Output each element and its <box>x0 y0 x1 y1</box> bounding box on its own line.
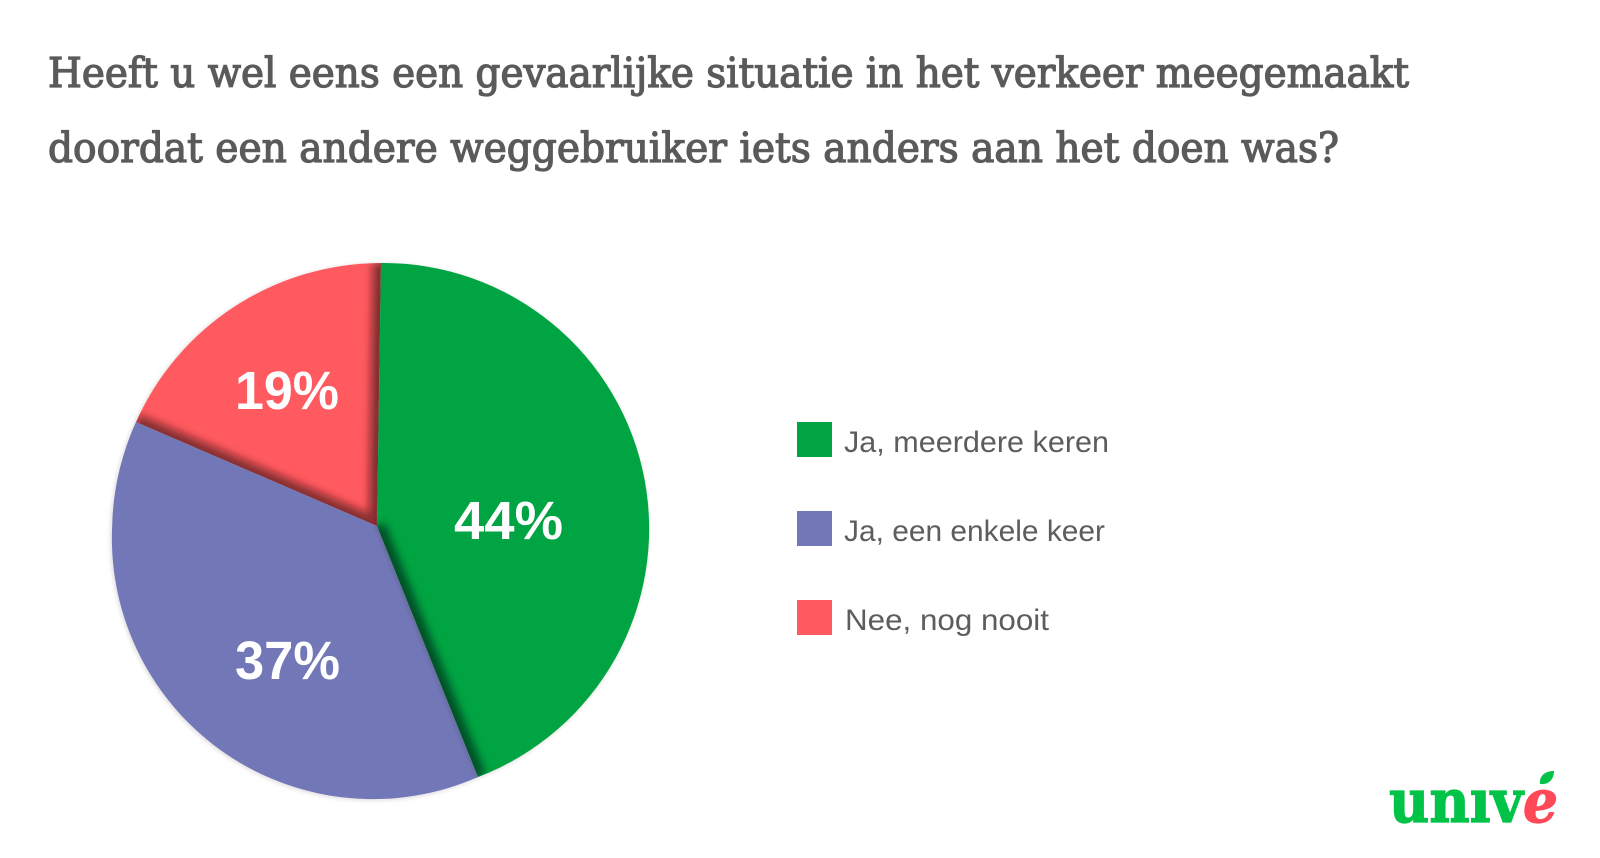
legend <box>797 422 1109 637</box>
label: 19%: 19% <box>235 361 339 421</box>
slice: Ja, meerdere keren 44% <box>377 263 649 777</box>
legend item: Ja, meerdere keren: Ja, meerdere keren <box>844 426 1109 459</box>
legend item: Nee, nog nooit: Nee, nog nooit <box>845 604 1050 637</box>
title <box>48 49 1409 172</box>
slice: Ja, een enkele keer 37% <box>112 422 478 799</box>
label: 44%: 44% <box>454 491 563 551</box>
title: Heeft u wel eens een gevaarlijke situatie in het verkeer meegemaakt <box>48 49 1409 97</box>
legend item: Ja, een enkele keer: Ja, een enkele keer <box>844 515 1105 548</box>
legend item: Nee, nog nooit <box>797 600 1050 637</box>
label: 37%: 37% <box>235 631 340 691</box>
logo: Univé: e <box>1523 767 1558 837</box>
pie chart <box>112 263 649 799</box>
logo: Univé: unıv <box>1389 767 1525 837</box>
slice: Nee, nog nooit 19% <box>136 263 381 526</box>
title: doordat een andere weggebruiker iets anders aan het doen was? <box>48 124 1339 172</box>
icon: leaf accent <box>1540 771 1554 784</box>
